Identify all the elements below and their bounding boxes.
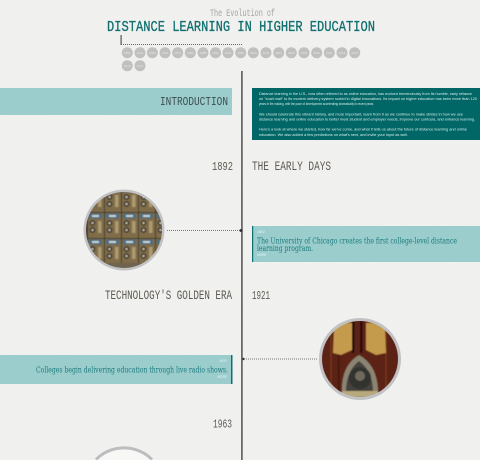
timeline navigation: 2013: [351, 51, 358, 55]
panel: introduction text: We should celebrate this vibrant history, and more important, learn from it as we continue to make strides in how we use: [259, 112, 464, 116]
panel: introduction heading bar: [0, 88, 232, 115]
timeline navigation: 2020: [137, 64, 144, 68]
timeline navigation: 2004: [288, 51, 295, 55]
timeline navigation: 1971: [174, 51, 181, 55]
heading: the evolution of: The Evolution of: [210, 8, 275, 20]
timeline navigation: 2000: [250, 51, 257, 55]
callout: 1921 event: 1921: [219, 359, 227, 363]
panel: introduction text: distance learning and online education to better meet student and employer needs, improve our curricula, and enhance learning.: [259, 117, 475, 122]
timeline navigation: 1964: [162, 51, 169, 55]
timeline navigation: 1985: [200, 51, 207, 55]
heading: the early days: THE EARLY DAYS: [252, 160, 331, 174]
timeline navigation: 2002: [275, 51, 282, 55]
title: DISTANCE LEARNING IN HIGHER EDUCATION: [107, 19, 375, 36]
timeline navigation: 1892: [124, 51, 131, 55]
panel: introduction text: [252, 88, 480, 140]
panel: introduction text: years in the making, with the pace of development accelerating dramatically in recent years.: [259, 101, 374, 106]
timeline navigation: 2011: [326, 51, 333, 55]
year: 1921: 1921: [252, 289, 270, 303]
year: 1963: 1963: [213, 417, 232, 431]
timeline navigation: 2006: [301, 51, 308, 55]
connector: 1921: [242, 358, 318, 360]
callout: 1921 event: [0, 355, 232, 384]
timeline navigation: 2001: [263, 51, 270, 55]
timeline navigation: 1993: [225, 51, 232, 55]
callout: 1921 event: MORE: [217, 375, 227, 379]
timeline navigation: 1963: [149, 51, 156, 55]
heading: technology's golden era: TECHNOLOGY'S GOLDEN ERA: [105, 289, 232, 303]
panel: introduction text: Here's a look at where we started, how far we've come, and what it tells us about the future of distance learning and online: [259, 126, 468, 132]
timeline navigation: 2012: [339, 51, 346, 55]
panel: introduction text: on "snail mail" to its modern delivery system rooted in digital innovations. Its impact on higher education has been more than 120: [259, 96, 478, 101]
icon: 1963 photo circle: [96, 448, 152, 460]
panel: introduction heading bar: INTRODUCTION: [160, 95, 228, 109]
timeline navigation: 1991: [212, 51, 219, 55]
icon: vintage radio photo: [319, 318, 401, 400]
timeline navigation: 1982: [187, 51, 194, 55]
panel: introduction text: education. We also added a few predictions on what's next, and invite your input as well.: [259, 132, 408, 137]
callout: 1892 event: 1892: [257, 230, 265, 234]
connector: 1892: [167, 229, 242, 232]
callout: 1921 event: Colleges begin delivering education through live radio shows.: [36, 366, 228, 376]
callout: 1892 event: learning program.: [257, 244, 313, 253]
icon: post office boxes photo: [84, 190, 164, 270]
year: 1892: 1892: [212, 160, 233, 174]
callout: 1892 event: [252, 226, 480, 262]
callout: 1892 event: MORE: [257, 253, 267, 257]
timeline navigation: 2014: [124, 64, 131, 68]
timeline navigation: 1921: [137, 51, 144, 55]
timeline navigation: 1998: [237, 51, 244, 55]
timeline navigation: 2010: [313, 51, 320, 55]
timeline navigation: [120, 35, 360, 71]
central timeline axis: [241, 71, 243, 460]
